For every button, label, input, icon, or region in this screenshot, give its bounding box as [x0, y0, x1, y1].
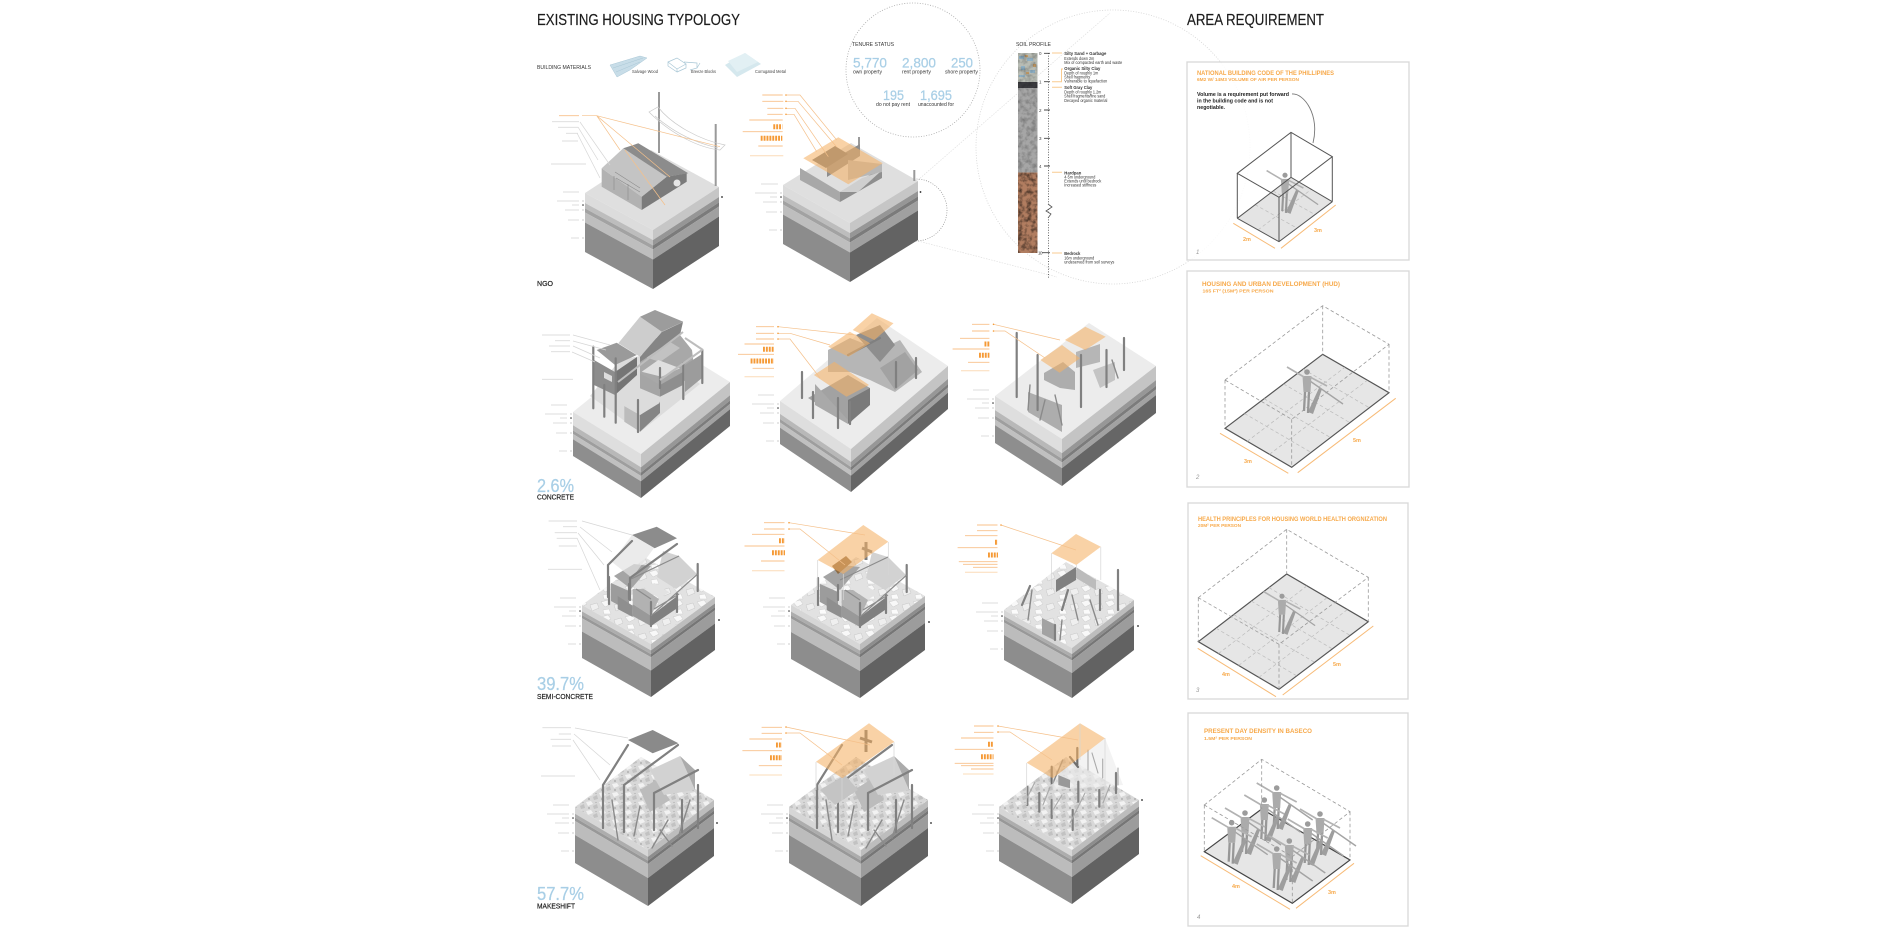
block: semi-concrete floor B [958, 525, 1139, 698]
depth ruler: 3 [1039, 136, 1042, 141]
stat: 2.6% concrete: 2.6% [537, 476, 574, 496]
note: Volume is a requirement put forward [1197, 92, 1289, 98]
panel: health principles: 5m [1333, 662, 1341, 668]
block: semi-concrete full house [548, 521, 720, 697]
soil labels: Decayed organic material [1064, 98, 1107, 103]
soil labels: Shell fragments [1064, 74, 1090, 79]
depth ruler: 10 [1038, 250, 1043, 256]
orange plane [816, 723, 894, 778]
label: NGO: NGO [537, 281, 554, 288]
soil profile: SOIL PROFILE [1016, 42, 1051, 48]
tenure status circle: unaccounted for [918, 102, 954, 108]
title: area requirement: AREA REQUIREMENT [1187, 12, 1324, 29]
depth ruler: 4 [1039, 164, 1042, 169]
dimensions [1198, 626, 1373, 697]
note [1197, 92, 1289, 111]
dimensions [1233, 205, 1336, 248]
panel: present day density: 3m [1328, 890, 1336, 896]
stat: 57.7% makeshift: MAKESHIFT [537, 904, 576, 910]
note: in the building code and is not [1197, 98, 1273, 104]
tenure status circle [846, 3, 980, 137]
tenure status circle: TENURE STATUS [852, 42, 894, 48]
panel: present day density: PRESENT DAY DENSITY IN BASECO [1204, 729, 1312, 735]
people [1212, 783, 1356, 891]
floor [1198, 574, 1368, 689]
orange roof plane [803, 137, 883, 184]
soil labels: Extends until bedrock [1064, 179, 1102, 184]
dashed volume [1198, 529, 1368, 689]
tenure status circle: 250 [951, 54, 973, 70]
floor [1237, 177, 1332, 242]
block: NGO floor plan [743, 95, 921, 282]
soil labels: Bedrock [1064, 251, 1081, 256]
soil labels: 4-5m underground [1064, 175, 1096, 180]
soil labels: Depth of roughly 1m [1064, 70, 1099, 75]
panel: national building code: 3m [1314, 228, 1322, 234]
floor [1225, 354, 1389, 467]
panel: health principles: 3 [1196, 688, 1200, 694]
tenure status circle: shore property [945, 70, 979, 76]
dashed volume [1204, 759, 1350, 903]
depth ruler: 0 [1039, 51, 1042, 56]
soil labels: Silty Sand + Garbage [1064, 51, 1107, 56]
tenure status circle: 195 [883, 87, 904, 103]
stat: 57.7% makeshift: 57.7% [537, 884, 584, 904]
soil labels: undeserved from soil surveys [1064, 260, 1114, 265]
block: makeshift floor A [742, 723, 932, 906]
soil labels: Organic Silty Clay [1064, 66, 1101, 71]
panel: national building code [1187, 62, 1409, 260]
soil labels [1064, 51, 1123, 265]
orange planes [1040, 327, 1106, 373]
dimensions [1201, 856, 1354, 909]
orange plane [1027, 723, 1105, 778]
tenure status circle: do not pay rent [876, 102, 911, 108]
panel: present day density: 1.5M² PER PERSON [1204, 736, 1252, 741]
soil labels: Hardpan [1064, 170, 1082, 175]
orange plane [1051, 534, 1101, 565]
block: NGO house [551, 92, 725, 289]
person [1287, 367, 1343, 414]
depth ruler: 1 [1039, 80, 1042, 84]
panel: housing and urban development: 3m [1244, 459, 1252, 465]
panel: present day density: 4m [1232, 884, 1240, 890]
wireframe volume [1237, 132, 1332, 242]
block: semi-concrete floor A [744, 523, 930, 698]
panel: health principles: HEALTH PRINCIPLES FOR HOUSING WORLD HEALTH ORGNIZATION [1198, 517, 1387, 523]
note: negotiable. [1197, 105, 1226, 111]
soil profile [1016, 42, 1123, 278]
orange plane [818, 525, 888, 574]
panel: housing and urban development: 5m [1353, 438, 1361, 444]
block: makeshift full house [541, 728, 718, 906]
panel: housing and urban development: 2 [1195, 475, 1200, 481]
dimensions [1220, 398, 1396, 473]
legend: building materials: Breeze Blocks [691, 69, 717, 74]
panel: health principles: 20M² PER PERSON [1198, 523, 1241, 528]
orange planes [814, 313, 894, 397]
tenure status circle: 2,800 [902, 54, 936, 70]
depth ruler [1038, 51, 1052, 278]
stat: 39.7% semi-concrete: 39.7% [537, 674, 584, 694]
tenure status circle: 1,695 [920, 87, 952, 103]
tenure status circle: rent property [902, 70, 931, 76]
soil labels: Vulnerable to liquefaction [1064, 79, 1108, 84]
soil labels: Soft Gray Clay [1064, 85, 1093, 90]
soil labels: Extends down 2m [1064, 56, 1095, 61]
panel: national building code: 6M2 W/ 14M3 VOLUME OF AIR PER PERSON [1197, 77, 1299, 82]
dashed volume [1225, 306, 1389, 467]
person [1267, 171, 1318, 214]
depth ruler: 2 [1039, 108, 1042, 113]
legend: building materials: BUILDING MATERIALS [537, 65, 591, 71]
person [1264, 592, 1315, 635]
panel: national building code: 2m [1243, 237, 1251, 243]
panel: housing and urban development [1187, 271, 1409, 487]
floor [1204, 809, 1350, 903]
panel: housing and urban development: 165 FT² (15M²) PER PERSON [1202, 288, 1274, 294]
block: concrete floor A [738, 313, 948, 492]
panel: health principles [1188, 503, 1408, 699]
panel: present day density [1188, 713, 1408, 926]
title: existing housing typology: EXISTING HOUSING TYPOLOGY [537, 12, 740, 29]
soil labels: Mix of compacted earth and waste [1064, 60, 1123, 65]
tenure status circle: own property [853, 70, 882, 76]
soil labels: 16m underground [1064, 255, 1095, 260]
block: makeshift floor B [955, 723, 1143, 904]
panel: national building code: NATIONAL BUILDING CODE OF THE PHILLIPINES [1197, 71, 1334, 77]
legend: building materials: Corrugated Metal [755, 69, 786, 74]
soil labels: Increased stiffness [1064, 183, 1096, 188]
tenure status circle: 5,770 [853, 54, 887, 70]
panel: housing and urban development: HOUSING AND URBAN DEVELOPMENT (HUD) [1202, 282, 1340, 288]
soil connectors [1052, 53, 1063, 253]
legend: building materials: Salvage Wood [632, 69, 658, 74]
panel: national building code: 1 [1196, 250, 1199, 256]
stat: 39.7% semi-concrete: SEMI-CONCRETE [537, 694, 593, 701]
panel: health principles: 4m [1222, 672, 1230, 678]
panel: present day density: 4 [1197, 915, 1201, 921]
legend: building materials [537, 53, 786, 77]
block: concrete full house [542, 310, 730, 498]
block: concrete floor B [953, 323, 1156, 486]
soil column [1018, 53, 1038, 253]
soil labels: Shell fragments/fine sand [1064, 94, 1106, 99]
stat: 39.7% semi-concrete [537, 674, 593, 701]
soil magnifier circles and connectors [885, 10, 1250, 284]
soil labels: Depth of roughly 1.2m [1064, 90, 1102, 95]
stat: 2.6% concrete: CONCRETE [537, 494, 574, 502]
